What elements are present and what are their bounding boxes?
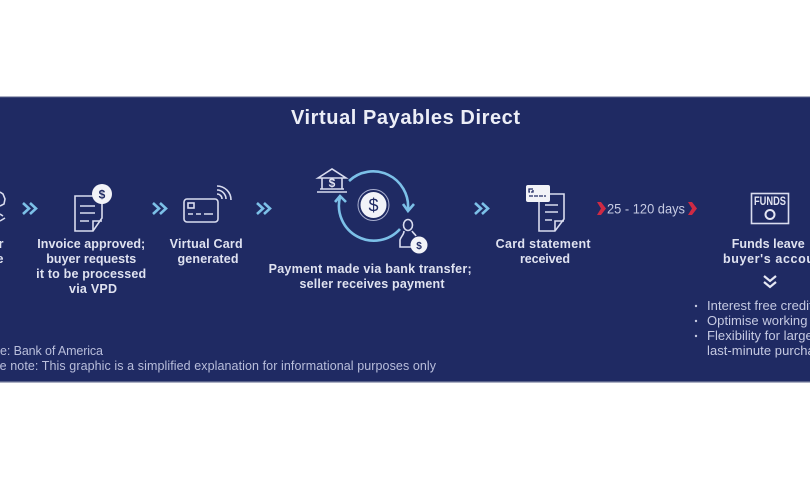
icon: dollar coin: [358, 190, 389, 220]
label: virtual card generated: Virtual Card: [170, 237, 243, 251]
label: invoice approved: it to be processed: [36, 267, 146, 281]
icon: statement with card: [526, 185, 564, 231]
duration text: 25 - 120 days: [607, 200, 685, 216]
icon: funds box: FUNDS: [754, 196, 786, 208]
label: virtual card generated: generated: [178, 252, 238, 266]
arrow: step 1 to 2: [23, 203, 36, 214]
title: Virtual Payables Direct: [291, 107, 520, 129]
label: card statement received: Card statement: [496, 237, 591, 251]
arrow: step 2 to 3: [153, 203, 166, 214]
red chevron left: [597, 202, 606, 215]
benefits list: Interest free credit: [707, 298, 810, 313]
chevrons down: [764, 276, 776, 287]
icon: seller with coin: [400, 220, 428, 254]
navy background panel: [0, 97, 810, 382]
step 3: virtual card: [170, 186, 246, 266]
icon: bank: $: [329, 176, 336, 190]
label: funds leave: Funds leave: [732, 237, 805, 251]
label: invoice approved: via VPD: [69, 282, 117, 296]
step 5: card statement: [496, 185, 594, 266]
label: invoice approved: buyer requests: [46, 252, 136, 266]
icon: seller with coin: $: [416, 241, 422, 252]
red chevron right: [688, 202, 697, 215]
benefits list: [695, 298, 810, 358]
step 1: cropped seller icon and label: [0, 192, 5, 266]
label: card statement received: received: [520, 252, 570, 266]
icon: bank: [317, 169, 347, 192]
step 2: invoice approved: [36, 184, 150, 296]
arrow: step 3 to 4: [257, 203, 270, 214]
icon: invoice with dollar badge: $: [99, 188, 106, 202]
label: payment made: Payment made via bank transfer;: [269, 262, 472, 276]
step 6: funds leave buyer's account: [695, 194, 810, 358]
arrow: step 4 to 5: [475, 203, 488, 214]
duration: 25 to 120 days: [597, 200, 697, 216]
step 4: payment made: [269, 169, 475, 291]
label: invoice approved: Invoice approved;: [37, 237, 145, 251]
icon: circular payment arrows: [335, 171, 414, 241]
icon: funds box: [752, 194, 788, 224]
label: payment made: seller receives payment: [300, 277, 445, 291]
source and note: [0, 344, 437, 373]
icon: dollar coin: $: [368, 196, 379, 216]
icon: contactless card: [184, 186, 231, 222]
